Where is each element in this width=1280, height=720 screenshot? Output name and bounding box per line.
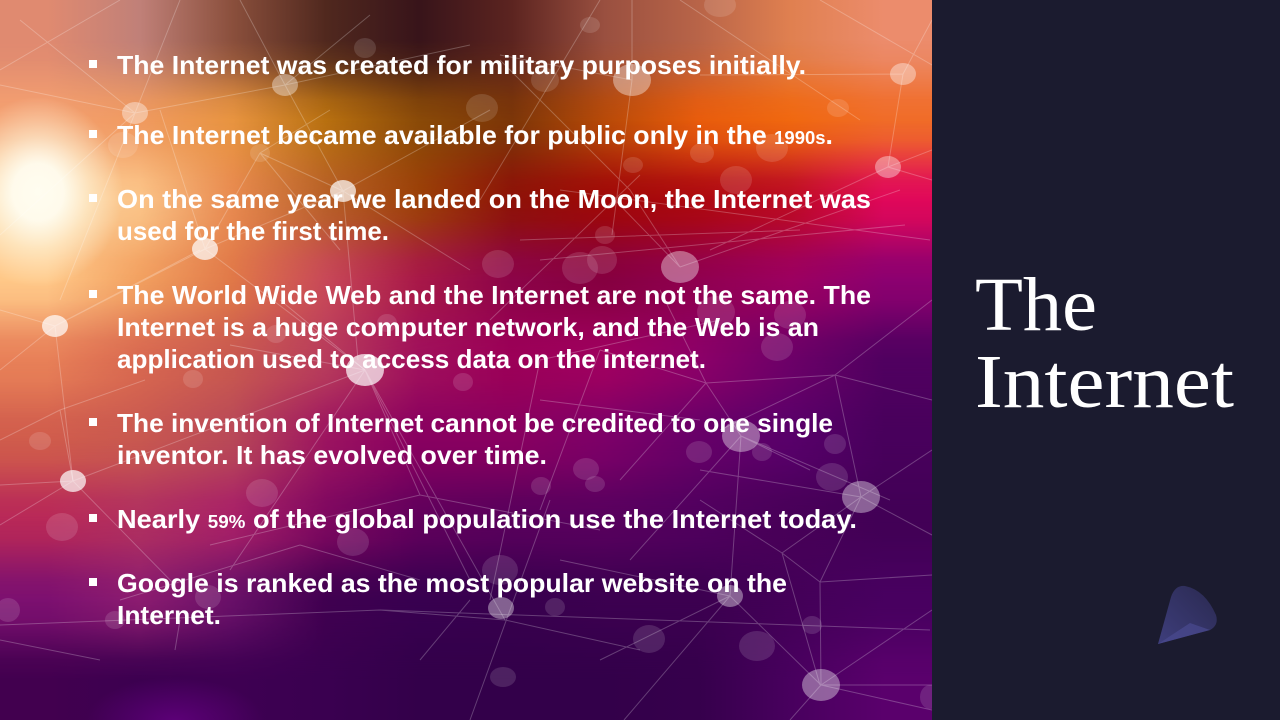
bullet: no single inventor: inventor. It has evolved over time. <box>117 440 547 470</box>
title: The <box>975 263 1097 347</box>
bullet: moon landing year: used for the first time. <box>117 216 389 246</box>
bullet: public availability: The Internet became available for public only in the 1990s. <box>117 120 833 150</box>
panel: dark title sidebar <box>932 0 1280 720</box>
bullet: moon landing year <box>89 184 871 246</box>
bullet: web versus internet <box>89 280 871 374</box>
bullet: most popular website: Google is ranked as the most popular website on the <box>117 568 787 598</box>
bullet: most popular website <box>89 568 787 630</box>
title: Internet <box>975 340 1234 424</box>
bullet: no single inventor: The invention of Internet cannot be credited to one single <box>117 408 833 438</box>
bullet: web versus internet: application used to access data on the internet. <box>117 344 706 374</box>
fact list <box>89 50 871 630</box>
network nodes: bright <box>122 63 916 701</box>
network lines <box>0 0 932 720</box>
bullet: web versus internet: Internet is a huge computer network, and the Web is an <box>117 312 819 342</box>
bullet: military origins: The Internet was created for military purposes initially. <box>117 50 806 80</box>
bullet: most popular website: Internet. <box>117 600 221 630</box>
title <box>975 263 1234 424</box>
icon: faint cone logo <box>1158 586 1217 644</box>
network nodes: faint <box>0 0 940 709</box>
network diagram overlay <box>0 0 940 720</box>
bullet: moon landing year: On the same year we landed on the Moon, the Internet was <box>117 184 871 214</box>
bullet: global usage: Nearly 59% of the global population use the Internet today. <box>117 504 857 534</box>
bullet: web versus internet: The World Wide Web and the Internet are not the same. The <box>117 280 871 310</box>
light glows <box>0 0 932 720</box>
panel: network photo background <box>0 0 932 720</box>
bullet: no single inventor <box>89 408 833 470</box>
